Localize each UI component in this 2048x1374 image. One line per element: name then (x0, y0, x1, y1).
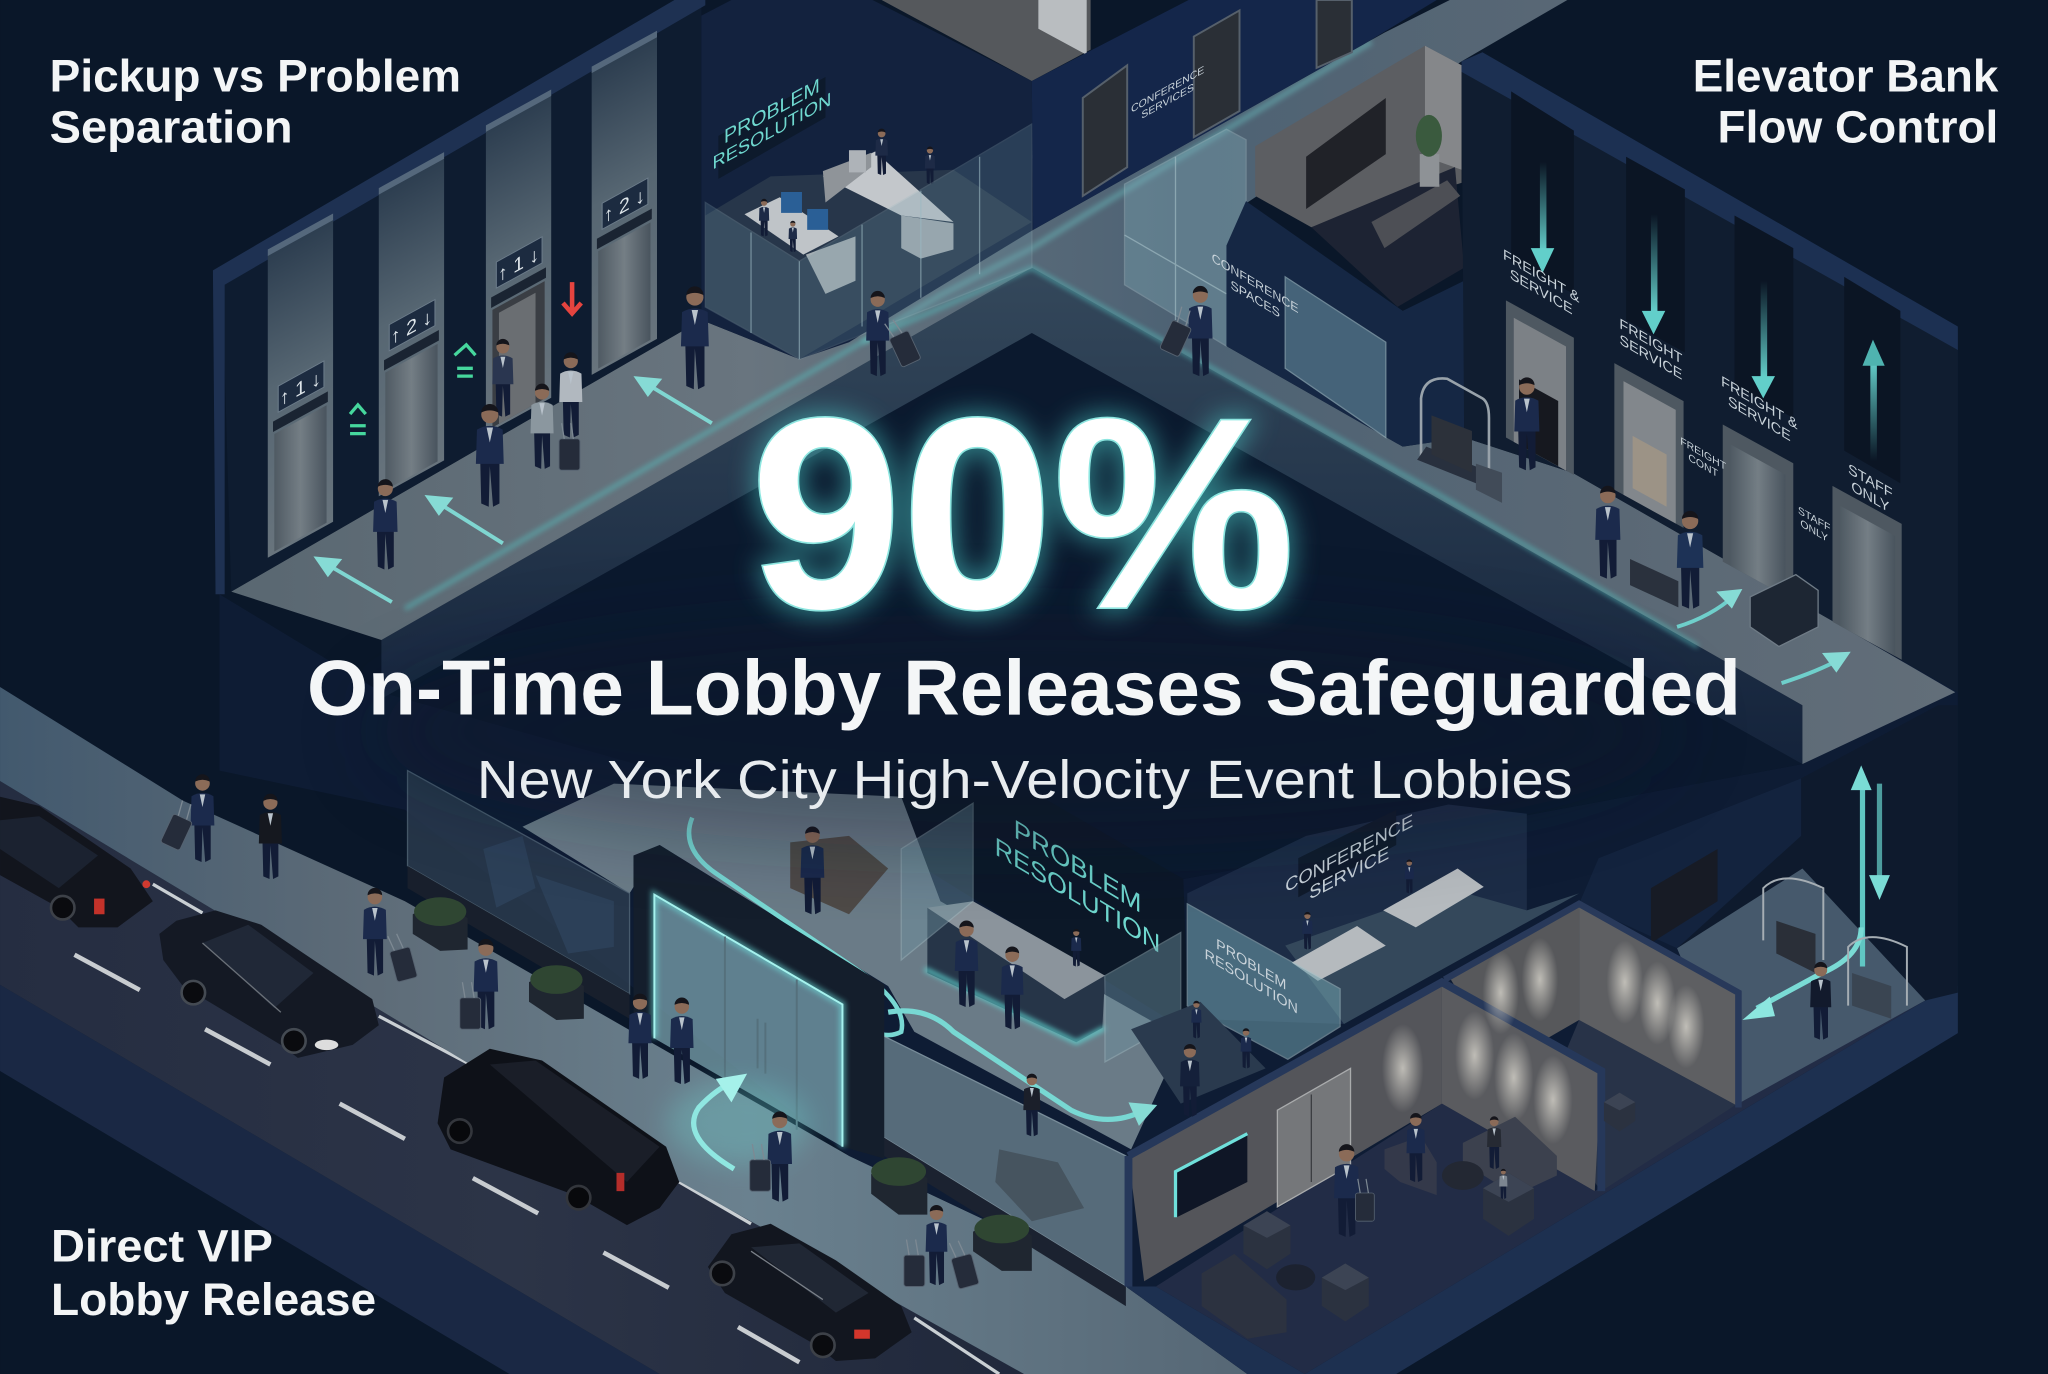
elevator column 4: ↑ 2 ↓ (604, 184, 645, 228)
elevator column 2: ↑ 2 ↓ (391, 305, 432, 349)
floor direction arrows upper left (313, 376, 712, 602)
floor entry glow arrow (666, 1074, 810, 1169)
floor teal edge line (405, 268, 1698, 647)
elevator column 3 open: ↑ 1 ↓ (498, 243, 539, 287)
glass doors (654, 895, 842, 1147)
double direction arrows (1851, 765, 1890, 967)
elevator column 1 (268, 214, 333, 558)
arrow down 2 (1642, 214, 1665, 334)
label: pickup vs problem: Pickup vs Problem (50, 50, 461, 101)
wall face (1462, 61, 1958, 692)
green pickup signs (350, 345, 475, 434)
wall sign conference services: CONFERENCE (1131, 64, 1204, 116)
office desks (1292, 926, 1386, 981)
reception desk (925, 901, 1105, 1042)
teal path lobby (689, 818, 902, 1035)
problem resolution sign lower: RESOLUTION (995, 831, 1160, 959)
room 2 wall right (1579, 904, 1736, 1105)
car 1 (0, 797, 153, 927)
small problem resolution sign: RESOLUTION (1205, 946, 1298, 1018)
planters (413, 897, 1032, 1271)
arrow down 3 (1751, 281, 1775, 398)
conference service sign: SERVICE (1309, 842, 1389, 904)
people upper floor (373, 286, 1703, 609)
service signs: FREIGHT & (1503, 247, 1580, 307)
second desk (1131, 1002, 1266, 1104)
service signs: ONLY (1851, 478, 1890, 517)
car 3 (708, 1224, 912, 1361)
floor arrows right hall (1677, 589, 1851, 683)
lounge door (1277, 1068, 1351, 1207)
label: direct vip: Direct VIP (51, 1221, 273, 1272)
conference corridor wall with doors (1032, 0, 1437, 230)
wall sign conference services: SERVICES (1141, 82, 1194, 122)
lounge and rooms (1126, 705, 1958, 1374)
glass room partition (1187, 904, 1340, 1059)
road and street (0, 781, 1024, 1374)
top edge (1462, 52, 1958, 350)
luggage cart and cases right hall (1417, 378, 1818, 647)
meeting furniture behind glass (995, 1149, 1084, 1221)
freight elevator wall (1462, 52, 1958, 692)
block glass panel (1285, 277, 1386, 438)
room carpet (705, 170, 1032, 359)
plant (1416, 115, 1442, 187)
wall screen right (1651, 849, 1718, 943)
van (438, 1049, 679, 1225)
service signs: FREIGHT & (1721, 373, 1798, 434)
wall face (222, 7, 701, 592)
lobby floor (522, 784, 1182, 1149)
freight elevator 1 open (1506, 300, 1574, 475)
room 2 wall left (1448, 904, 1579, 1064)
freight elevator 4 (1832, 486, 1902, 660)
glass partition (705, 124, 1032, 359)
block sign: SPACES (1230, 277, 1280, 321)
wall screen (1306, 98, 1386, 209)
right hall floor (1677, 869, 1925, 1105)
elevator column 4 (592, 31, 657, 375)
lounge wall top edges (1128, 982, 1601, 1286)
elevator column 3 open (486, 89, 551, 434)
elevator bank wall (213, 0, 705, 594)
top room whiteboard (1038, 0, 1087, 55)
navy block front (1226, 201, 1464, 447)
freight elevator 2 open (1614, 363, 1684, 528)
arrow up 4 (1863, 340, 1885, 461)
main entrance portal (633, 845, 884, 1158)
service signs: SERVICE (1728, 393, 1791, 445)
wood desk (790, 836, 888, 914)
center text soft shade (371, 614, 1677, 849)
sidewalk (0, 687, 1247, 1374)
desks and monitors (744, 150, 953, 294)
sign: PROBLEM (724, 74, 820, 149)
cars (0, 797, 912, 1361)
curved floor arrow (1742, 927, 1861, 1020)
red down arrow (563, 282, 581, 313)
glass rail faces (381, 268, 1802, 764)
wall top edge (213, 0, 705, 594)
people lower floor (160, 774, 1831, 1289)
service signs: FREIGHT (1619, 316, 1683, 368)
sign: RESOLUTION (713, 89, 831, 174)
service signs: SERVICE (1620, 332, 1682, 384)
service signs: STAFF (1848, 461, 1893, 502)
planter base wall left (408, 866, 630, 1019)
building silhouette (219, 333, 1958, 1374)
meeting table (1371, 180, 1460, 248)
service signs: STAFF (1798, 505, 1830, 535)
right hall back wall (1599, 705, 1958, 1000)
room floor (1311, 167, 1464, 307)
luggage carts (1763, 878, 1907, 1019)
base wall right of entrance (878, 1134, 1126, 1306)
glass side right of entrance (878, 1033, 1126, 1286)
seating behind left glass (483, 836, 614, 953)
lounge left wall (1128, 982, 1442, 1281)
doors (1083, 0, 1352, 196)
lit top room (882, 0, 1091, 81)
cyan door edge glow (654, 895, 842, 1147)
block sign: CONFERENCE (1212, 250, 1299, 316)
problem resolution room upper (701, 0, 1091, 359)
label: pickup vs problem: Separation (50, 101, 293, 152)
wall spot lights (1382, 938, 1704, 1144)
headline: On-Time Lobby Releases Safeguarded (307, 643, 1741, 731)
side glass wall left (408, 771, 630, 994)
conference block (1125, 46, 1464, 447)
lounge left base band (1126, 1286, 1305, 1374)
lounge floor (1156, 1000, 1925, 1374)
lower lobby (408, 771, 1579, 1306)
service signs: CONT (1688, 452, 1718, 480)
label: direct vip: Lobby Release (51, 1274, 376, 1325)
problem resolution back wall (888, 771, 1189, 1032)
room 2 wall top edges (1445, 904, 1738, 1108)
conference service room (1131, 805, 1579, 1104)
service signs: FREIGHT (1680, 436, 1726, 473)
subtitle: New York City High-Velocity Event Lobbies (477, 751, 1573, 810)
service signs: ONLY (1800, 518, 1828, 545)
upper floor slab (231, 0, 1955, 764)
staff (759, 129, 935, 252)
elevator column 1: ↑ 1 ↓ (280, 367, 321, 411)
floor surface (231, 0, 1955, 764)
outer building base band (1305, 986, 1958, 1374)
big stat 90%: 90% (750, 361, 1295, 665)
curb lines (153, 884, 999, 1374)
meeting room floor (1541, 1020, 1736, 1191)
room back wall (701, 0, 1033, 359)
arrow down 1 (1531, 162, 1554, 273)
elevator column 2 (379, 152, 444, 496)
service signs (1503, 247, 1893, 546)
label: elevator bank: Elevator Bank (1693, 50, 1999, 101)
conference service sign: CONFERENCE (1285, 810, 1413, 897)
lounge right wall (1442, 982, 1601, 1191)
lounge sofas (1202, 1093, 1635, 1339)
service signs: SERVICE (1510, 266, 1573, 318)
small problem resolution sign: PROBLEM (1216, 936, 1286, 994)
freight elevator 3 (1723, 424, 1793, 600)
recessed panels (1511, 91, 1900, 483)
label: elevator bank: Flow Control (1718, 101, 1998, 152)
central dark diamond (381, 333, 1802, 879)
glass partition lower (901, 803, 973, 960)
problem resolution sign lower: PROBLEM (1014, 814, 1141, 920)
grey meeting room (1255, 46, 1462, 227)
big stat 90%: 90% (750, 361, 1295, 665)
car 2 (159, 910, 379, 1058)
room floor (1285, 888, 1579, 1024)
lounge wall screen (1176, 1134, 1247, 1217)
glass panel by reception (1105, 933, 1181, 1062)
glass box (1125, 129, 1246, 346)
road lane dashes (74, 955, 799, 1362)
